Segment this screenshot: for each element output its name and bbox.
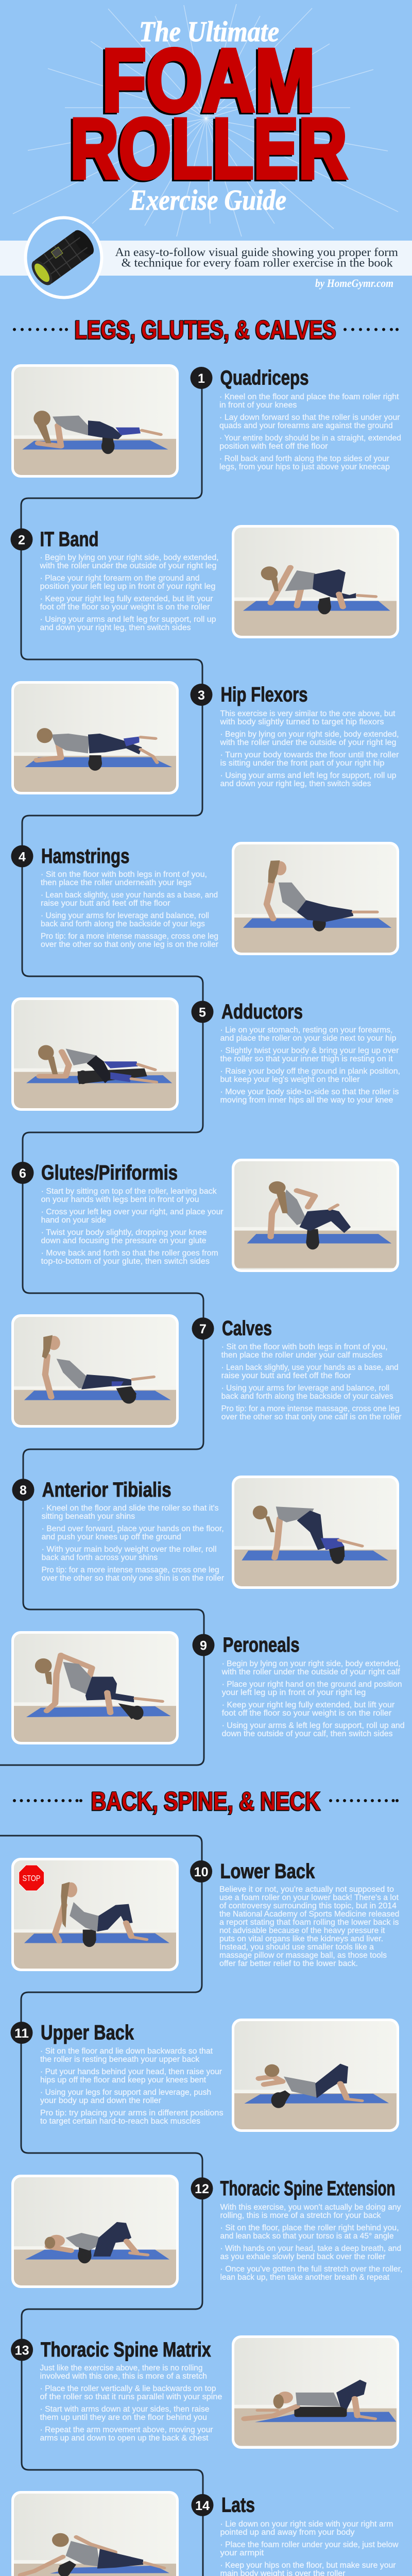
explanation text: use a foam roller on your lower back! There's a lot: [219, 1893, 399, 1902]
instructions: · Twist your body slightly, dropping your knee: [41, 1228, 207, 1237]
heading: Upper Back: [41, 2022, 134, 2044]
instructions: quads and your forearms are against the ground: [219, 421, 393, 430]
number badge 4: [11, 845, 33, 868]
instructions: · Using your arms and left leg for support, roll up: [220, 771, 397, 780]
number badge 1: 1: [198, 371, 205, 386]
number badge 2: [10, 529, 33, 550]
photo: calves: [0, 1314, 179, 1428]
instructions: involved with this one, this is more of a stretch: [40, 2372, 207, 2381]
photo: quadriceps: [0, 364, 179, 478]
instructions: but keep your leg's weight on the roller: [220, 1075, 359, 1084]
number badge 2: 2: [18, 533, 25, 547]
number badge 8: [12, 1479, 34, 1501]
instructions: · Begin by lying on your right side, body extended,: [40, 553, 218, 562]
instructions: [39, 553, 218, 632]
instructions: as you exhale slowly bend back over the roller: [220, 2252, 385, 2261]
exercise 13: Thoracic Spine Matrix: [11, 2335, 399, 2449]
icon: stop sign: STOP: [23, 1874, 40, 1883]
instructions: the roller so that your inner thigh is resting on it: [220, 1055, 393, 1063]
exercise 8: Anterior Tibialis: [12, 1476, 399, 1589]
instructions: [42, 1504, 224, 1583]
instructions: · Using your arms & left leg for support, roll up and: [222, 1721, 405, 1730]
instructions: down the outside of your calf, then switch sides: [222, 1730, 393, 1738]
instructions: · Sit on the floor with both legs in front of you,: [41, 870, 207, 879]
photo: upper back: [232, 2019, 399, 2132]
instructions: · Begin by lying on your right side, body extended,: [222, 1659, 401, 1668]
photo: peroneals: [0, 1631, 179, 1744]
instructions: back and forth along the backside of your legs: [41, 920, 205, 928]
instructions: and push your knees up off the ground: [42, 1533, 181, 1541]
photo: anterior tibialis: [232, 1476, 399, 1589]
instructions: Pro tip: for a more intense massage, cross one leg: [42, 1566, 219, 1574]
exercise 12: Thoracic Spine Extension: [0, 2175, 403, 2288]
instructions: then place the roller underneath your legs: [41, 878, 192, 887]
instructions: and place the roller on your side next to your hip: [220, 1034, 397, 1043]
number badge 7: 7: [199, 1322, 207, 1336]
instructions: · Raise your body off the ground in plank position,: [220, 1067, 400, 1076]
instructions: down and focusing the pressure on your glute: [41, 1236, 207, 1245]
number badge 14: [192, 2494, 213, 2516]
heading: Hamstrings: [41, 845, 129, 868]
instructions: over the other so that only one calf is on the roller: [221, 1413, 402, 1421]
exercise 3: Hip Flexors: [0, 681, 399, 794]
instructions: over the other so that only one leg is on the roller: [41, 940, 218, 949]
connector line: back section: [0, 1836, 412, 2576]
instructions: top-to-bottom of your glute, then switch sides: [41, 1257, 210, 1266]
instructions: [221, 1343, 402, 1421]
instructions: Pro tip: try placing your arms in different positions: [40, 2109, 224, 2117]
instructions: · Using your legs for support and leverage, push: [40, 2088, 211, 2097]
explanation text: [219, 1885, 400, 1968]
section heading: back, spine and neck: BACK, SPINE, & NECK: [91, 1787, 320, 1816]
instructions: · Lean back slightly, use your hands as a base, and: [221, 1363, 399, 1372]
instructions: foot off the floor so your weight is on the roller: [40, 603, 210, 612]
exercise 14: Lats: [0, 2491, 401, 2576]
instructions: · Begin by lying on your right side, body extended,: [220, 730, 399, 739]
explanation text: massage pillow or massage ball, as those tools: [219, 1951, 387, 1960]
instructions: position your left leg up in front of your right leg: [40, 582, 215, 591]
instructions: pointed up and away from your body: [220, 2528, 355, 2537]
heading: Lower Back: [220, 1860, 315, 1883]
exercise 10: Lower Back: [0, 1858, 400, 1971]
icon: stop sign: [19, 1865, 44, 1891]
instructions: on your hands with legs bent in front of you: [41, 1195, 199, 1204]
instructions: with the roller under the outside of your right leg: [39, 562, 216, 570]
instructions: · Your entire body should be in a straight, extended: [219, 434, 401, 443]
heading: Calves: [222, 1317, 272, 1340]
instructions: [219, 393, 401, 471]
instructions: · Keep your hips on the floor, but make sure your: [220, 2561, 396, 2570]
header: title block: [0, 4, 412, 298]
exercise 1: Quadriceps: [0, 364, 401, 478]
heading: Thoracic Spine Matrix: [41, 2338, 211, 2361]
explanation text: offer far better relief to the lower back.: [219, 1959, 358, 1968]
number badge 10: [190, 1860, 212, 1883]
instructions: back and forth across your shins: [42, 1553, 158, 1562]
instructions: the roller is resting beneath your upper back: [40, 2055, 199, 2064]
photo: adductors: [0, 997, 179, 1111]
number badge 9: 9: [200, 1638, 207, 1653]
heading: Quadriceps: [220, 367, 309, 389]
instructions: them up until they are on the floor behind you: [40, 2413, 207, 2422]
subtitle band: [0, 241, 412, 276]
heading: Anterior Tibialis: [42, 1479, 171, 1501]
instructions: · Turn your body towards the floor until the roller: [220, 751, 399, 759]
explanation text: of controversy surrounding this topic, but in 2014: [219, 1902, 397, 1910]
section heading: legs, glutes and calves: LEGS, GLUTES, & CALVES: [75, 315, 336, 344]
photo: lower back: [0, 1858, 179, 1971]
instructions: · Using your arms for leverage and balance, roll: [41, 911, 209, 920]
heading: Peroneals: [223, 1634, 300, 1656]
byline: by HomeGymr.com: [315, 277, 393, 290]
instructions: · With hands on your head, take a deep breath, and: [220, 2244, 401, 2253]
instructions: · Keep your right leg fully extended, but lift your: [222, 1701, 394, 1709]
instructions: [41, 1187, 224, 1266]
instructions: [220, 2203, 403, 2282]
instructions: [40, 2047, 224, 2126]
number badge 12: [191, 2177, 213, 2199]
number badge 7: [192, 1317, 214, 1340]
instructions: · Move your body side-to-side so that the roller is: [220, 1088, 399, 1096]
instructions: [40, 2364, 222, 2443]
instructions: with the roller under the outside of your right leg: [219, 738, 397, 747]
instructions: · Using your arms and left leg for support, roll up: [40, 615, 216, 624]
instructions: · Place the roller vertically & lie backwards on top: [40, 2384, 216, 2393]
instructions: arms up and down to open up the back & chest: [40, 2434, 209, 2443]
photo: thoracic spine extension: [0, 2175, 179, 2288]
instructions: with the roller under the outside of your right calf: [221, 1668, 400, 1676]
instructions: then place the roller under your calf muscles: [221, 1351, 383, 1360]
subtitle text: [115, 246, 398, 269]
instructions: Pro tip: for a more intense massage, cross one leg: [41, 932, 218, 941]
heading: Adductors: [221, 1001, 303, 1023]
number badge 6: 6: [19, 1166, 26, 1181]
instructions: position with feet off the floor: [219, 442, 328, 451]
instructions: · Kneel on the floor and slide the roller so that it's: [42, 1504, 219, 1513]
instructions: of the roller so that it runs parallel with your spine: [40, 2393, 222, 2401]
exercise 6: Glutes/Piriformis: [11, 1159, 399, 1272]
instructions: hips up off the floor and keep your knees bent: [40, 2076, 207, 2084]
exercise 7: Calves: [0, 1314, 402, 1428]
instructions: · Sit on the floor, place the roller right behind you,: [220, 2224, 399, 2232]
instructions: With this exercise, you won't actually be doing any: [220, 2203, 401, 2212]
photo: lats: [0, 2491, 179, 2576]
instructions: · Lie on your stomach, resting on your forearms,: [220, 1026, 392, 1035]
subtitle text: & technique for every foam roller exercise in the book: [122, 257, 393, 269]
number badge 12: 12: [195, 2182, 209, 2196]
instructions: · Bend over forward, place your hands on the floor,: [42, 1524, 224, 1533]
title: The Ultimate: The Ultimate: [139, 16, 279, 48]
explanation text: Instead, you should use smaller tools like a: [219, 1943, 374, 1952]
number badge 5: 5: [199, 1006, 206, 1020]
instructions: and down your right leg, then switch sides: [220, 779, 371, 788]
instructions: · Once you've gotten the full stretch over the roller,: [220, 2265, 403, 2274]
number badge 10: 10: [194, 1865, 209, 1879]
title: ROLLER: ROLLER: [70, 101, 347, 196]
instructions: · Sit on the floor and lie down backwards so that: [40, 2047, 213, 2056]
heading: Glutes/Piriformis: [41, 1161, 178, 1184]
instructions: · Roll back and forth along the top sides of your: [219, 454, 389, 463]
heading: IT Band: [40, 528, 99, 551]
instructions: · Sit on the floor with both legs in front of you,: [221, 1343, 388, 1351]
instructions: · Using your arms for leverage and balance, roll: [221, 1384, 389, 1393]
number badge 9: [193, 1634, 214, 1656]
instructions: hand on your side: [41, 1216, 106, 1225]
instructions: [221, 1659, 405, 1738]
number badge 4: 4: [19, 850, 26, 865]
instructions: rolling, this is more of a stretch for your back: [220, 2211, 381, 2220]
instructions: raise your butt and feet off the floor: [221, 1371, 351, 1380]
instructions: your body up and down the roller: [40, 2096, 161, 2105]
sunburst rays: [13, 4, 398, 236]
instructions: back and forth along the backside of your calves: [221, 1392, 393, 1401]
instructions: · Move back and forth so that the roller goes from: [41, 1249, 218, 1258]
instructions: and down your right leg, then switch sides: [40, 623, 191, 632]
instructions: and lean back so that your torso is at a 45° angle: [220, 2232, 393, 2241]
number badge 5: [192, 1001, 213, 1023]
instructions: · Kneel on the floor and place the foam roller right: [219, 393, 399, 401]
instructions: [41, 870, 218, 949]
instructions: is sitting under the front part of your right hip: [220, 759, 384, 768]
title: FOAM: FOAM: [102, 31, 315, 130]
explanation text: a report stating that foam rolling the lower back is: [219, 1918, 399, 1927]
instructions: · Repeat the arm movement above, moving your: [40, 2426, 213, 2434]
exercise 2: IT Band: [10, 525, 399, 638]
instructions: lean back up, then take another breath & repeat: [220, 2273, 390, 2282]
heading: Hip Flexors: [220, 683, 308, 706]
icon: foam roller in circle: [26, 217, 102, 298]
heading: Lats: [221, 2494, 255, 2516]
number badge 3: 3: [198, 688, 205, 703]
instructions: · Place your right forearm on the ground and: [40, 574, 200, 583]
instructions: This exercise is very similar to the one above, but: [220, 709, 396, 718]
photo: glutes: [232, 1159, 399, 1272]
instructions: to target certain hard-to-reach back muscles: [40, 2117, 200, 2126]
instructions: · Cross your left leg over your right, and place your: [41, 1208, 224, 1216]
photo: hamstrings: [232, 842, 399, 955]
instructions: Just like the exercise above, there is no rolling: [40, 2364, 203, 2372]
instructions: · Lay down forward so that the roller is under your: [219, 413, 400, 422]
explanation text: the National Academy of Sports Medicine released: [219, 1910, 400, 1919]
connector line: legs section: [0, 389, 204, 1765]
number badge 3: [191, 684, 212, 706]
instructions: moving from inner hips all the way to your knee: [220, 1096, 393, 1105]
subtitle text: An easy-to-follow visual guide showing you proper form: [115, 246, 398, 259]
photo: thoracic spine matrix: [232, 2335, 399, 2449]
instructions: legs, from your hips to just above your kneecap: [219, 463, 390, 471]
title: Exercise Guide: Exercise Guide: [129, 184, 286, 216]
instructions: [220, 2520, 401, 2576]
instructions: · Slightly twist your body & bring your leg up over: [220, 1046, 399, 1055]
instructions: Pro tip: for a more intense massage, cross one leg: [221, 1404, 400, 1413]
number badge 13: 13: [15, 2343, 29, 2358]
instructions: in front of your knees: [219, 401, 297, 410]
number badge 11: 11: [14, 2026, 29, 2041]
instructions: · Start by sitting on top of the roller, leaning back: [41, 1187, 217, 1196]
instructions: · With your main body weight over the roller, roll: [42, 1545, 217, 1554]
exercise 11: Upper Back: [10, 2019, 399, 2132]
instructions: your left leg up in front of your right leg: [222, 1688, 366, 1697]
instructions: · Lean back slightly, use your hands as a base, and: [41, 891, 218, 900]
instructions: · Keep your right leg fully extended, but lift your: [40, 595, 213, 603]
instructions: · Lie down on your right side with your right arm: [220, 2520, 393, 2529]
instructions: · Put your hands behind your head, then raise your: [40, 2067, 222, 2076]
instructions: over the other so that only one shin is on the roller: [42, 1574, 224, 1583]
number badge 8: 8: [20, 1483, 27, 1498]
number badge 1: [191, 367, 212, 389]
instructions: [219, 709, 399, 788]
number badge 13: [11, 2339, 33, 2361]
instructions: your armpit: [220, 2549, 264, 2557]
explanation text: puts on vital organs like the kidneys and liver.: [219, 1935, 383, 1943]
number badge 6: [11, 1162, 34, 1184]
exercise 4: Hamstrings: [11, 842, 399, 955]
instructions: raise your butt and feet off the floor: [41, 899, 170, 908]
explanation text: Believe it or not, you're actually not supposed to: [219, 1885, 394, 1894]
explanation text: not advisable because of the heavy pressure it: [219, 1926, 385, 1935]
instructions: with body slightly turned to target hip flexors: [219, 718, 384, 726]
instructions: · Place the foam roller under your side, just below: [220, 2540, 399, 2549]
exercise 5: Adductors: [0, 997, 400, 1111]
photo: hip flexors: [0, 681, 179, 794]
number badge 11: [10, 2022, 33, 2044]
exercise 9: Peroneals: [0, 1631, 405, 1744]
instructions: sitting beneath your shins: [42, 1512, 135, 1521]
number badge 14: 14: [195, 2499, 210, 2513]
instructions: · Place your right hand on the ground and position: [222, 1680, 402, 1689]
instructions: [220, 1026, 400, 1105]
instructions: foot off the floor so your weight is on the roller: [222, 1709, 391, 1718]
photo: IT band: [232, 525, 399, 638]
instructions: · Start with arms down at your sides, then raise: [40, 2405, 210, 2414]
